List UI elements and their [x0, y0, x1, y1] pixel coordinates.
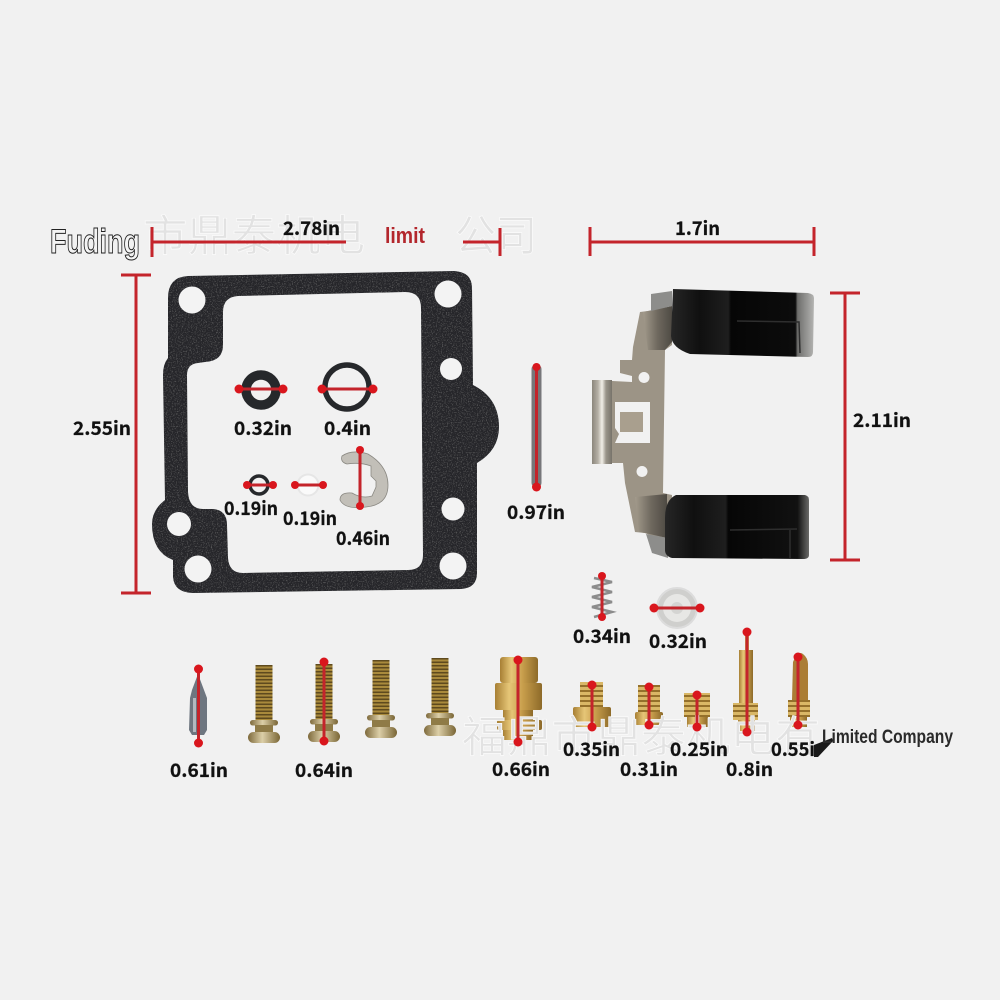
measure 0.34in spring	[573, 572, 631, 649]
dimension 2.11in: 2.11in	[853, 406, 911, 433]
dimension 2.78in: 2.78in	[283, 214, 340, 241]
smudge mark	[814, 738, 833, 757]
screw 1	[248, 665, 280, 743]
measure 0.61in needle	[170, 664, 228, 783]
round washer 0.32in	[657, 588, 697, 628]
watermark bottom: 福鼎市鼎泰机电有	[462, 714, 820, 762]
measure 0.32in washer: 0.32in	[649, 627, 707, 654]
dimension 2.78in	[152, 214, 500, 257]
measure 0.97in pin	[507, 363, 565, 525]
window tab	[620, 412, 643, 432]
brass jet 0.35in	[573, 682, 611, 727]
bottom shade	[635, 494, 667, 538]
measure 0.55in tube: 0.55i	[771, 735, 815, 762]
dimension 2.55in: 2.55in	[73, 414, 131, 441]
measure 0.66in jet	[492, 656, 550, 782]
measure 0.32in ring	[234, 384, 292, 441]
top block highlight	[737, 321, 800, 353]
measure 0.8in needle jet	[726, 628, 773, 782]
measure 0.25in jet	[670, 690, 728, 762]
text Limited Company: Limited Company	[822, 727, 953, 748]
measure 0.66in jet: 0.66in	[492, 755, 550, 782]
measure 0.64in screw	[295, 658, 353, 783]
brass jet 0.25in	[684, 693, 710, 727]
bottom block highlight	[730, 529, 797, 558]
top shade	[643, 306, 672, 350]
measure 0.4in ring: 0.4in	[324, 414, 371, 441]
O-ring 0.4in	[325, 365, 369, 409]
gasket holes	[167, 280, 466, 582]
brass emulsion tube 0.55in	[788, 653, 810, 727]
measure 0.55in tube	[771, 652, 815, 762]
measure 0.31in jet	[620, 682, 678, 782]
measure 0.25in jet: 0.25in	[670, 735, 728, 762]
clear washer 0.19in	[298, 474, 318, 496]
bracket roller	[592, 380, 612, 464]
dimension 2.11in	[830, 293, 911, 560]
watermark top: 市鼎泰机电	[143, 213, 365, 261]
measure 0.19in washer	[283, 481, 337, 531]
screw 4	[424, 658, 456, 736]
measure 0.64in screw: 0.64in	[295, 756, 353, 783]
O-ring 0.32in	[246, 375, 276, 405]
grey bottom cap	[646, 534, 668, 558]
large brass jet	[495, 657, 542, 740]
pin	[532, 365, 542, 487]
measure 0.19in washer: 0.19in	[283, 504, 337, 531]
measure 0.19in ring	[224, 481, 278, 521]
measure 0.35in jet	[563, 680, 620, 762]
pointed float needle	[189, 674, 207, 735]
brand text Fuding: Fuding	[50, 223, 140, 261]
large bracket with black blocks	[592, 289, 814, 559]
spring	[592, 578, 612, 617]
measure 0.35in jet: 0.35in	[563, 735, 620, 762]
watermark top	[143, 213, 537, 261]
dimension 1.7in: 1.7in	[675, 214, 720, 241]
grey top cap	[651, 291, 672, 311]
brass needle jet 0.8in	[733, 633, 758, 733]
text limit: limit	[385, 223, 426, 248]
top black block	[671, 289, 814, 357]
measure 0.46in clip: 0.46in	[336, 524, 390, 551]
watermark top: 公司	[455, 213, 537, 261]
measure 0.61in needle: 0.61in	[170, 756, 228, 783]
gasket	[152, 271, 499, 593]
E-clip	[340, 452, 388, 508]
measure 0.4in ring	[318, 384, 378, 441]
bracket metal plate	[592, 308, 672, 545]
screw 3	[365, 660, 397, 738]
measure 0.46in clip	[336, 446, 390, 551]
measure 0.32in ring: 0.32in	[234, 414, 292, 441]
measure 0.32in washer	[649, 604, 707, 654]
small O-ring 0.19in	[250, 476, 268, 494]
measure 0.31in jet: 0.31in	[620, 755, 678, 782]
measure 0.97in pin: 0.97in	[507, 498, 565, 525]
measure 0.34in spring: 0.34in	[573, 622, 631, 649]
brass jet 0.31in	[635, 685, 663, 725]
dimension 2.55in	[73, 275, 151, 593]
screw 2	[308, 664, 340, 742]
measure 0.8in needle jet: 0.8in	[726, 755, 773, 782]
measure 0.19in ring: 0.19in	[224, 494, 278, 521]
dimension 1.7in	[590, 214, 814, 256]
bottom black block	[665, 495, 809, 559]
